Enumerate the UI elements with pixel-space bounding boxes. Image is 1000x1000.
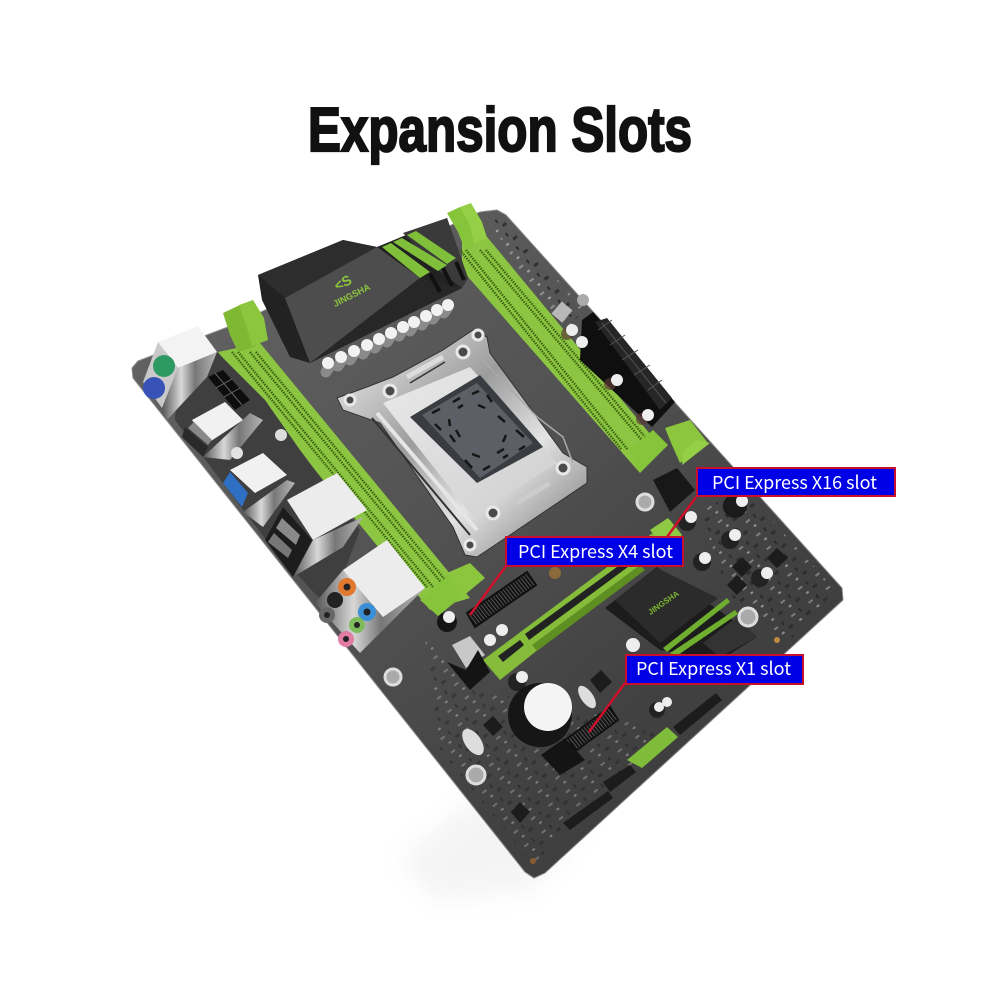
8-pin power connector	[208, 370, 250, 410]
chipset heatsink: JINGSHA	[646, 589, 681, 617]
component texture: lower board	[425, 640, 670, 868]
LAN and USB stack	[265, 473, 367, 577]
green front-panel connector	[627, 727, 678, 768]
heat spreader marks	[432, 391, 525, 470]
socket screws	[345, 330, 569, 550]
audio jacks	[319, 578, 376, 647]
CPU socket	[337, 330, 587, 557]
chipset heatsink	[605, 567, 757, 660]
rear IO panel	[143, 326, 425, 653]
audio panel	[315, 540, 425, 653]
CPU window	[410, 375, 543, 483]
USB 2.0 port	[182, 402, 263, 460]
24-pin power connector	[580, 312, 675, 427]
VRM heatsink	[258, 218, 468, 363]
CPU heat spreader	[422, 383, 533, 478]
M.2 slot	[653, 468, 695, 512]
chips	[483, 548, 788, 823]
PCI Express X4 slot	[467, 572, 536, 627]
socket plate	[383, 367, 557, 517]
PS/2 port	[143, 326, 217, 420]
right RAM slots	[447, 203, 710, 473]
motherboard	[132, 203, 843, 878]
drop shadow under board	[400, 800, 590, 900]
black block by X4 slot	[447, 650, 490, 690]
crystals	[458, 683, 599, 759]
IO base components	[175, 352, 360, 610]
socket levers	[372, 350, 573, 535]
small capacitors near X4 slot	[437, 567, 672, 718]
mounting holes	[385, 494, 757, 784]
battery	[508, 683, 572, 747]
callout lines	[470, 497, 696, 732]
left RAM slots	[218, 300, 485, 616]
board base	[132, 210, 843, 878]
capacitors by 24-pin connector	[551, 294, 654, 425]
PCI Express X16 slot	[483, 518, 682, 680]
VRM capacitors right	[530, 494, 780, 864]
title: Expansion Slots	[308, 96, 692, 165]
component texture: right	[700, 490, 835, 640]
component texture: upper right	[490, 216, 585, 335]
inductor near X4 slot	[452, 636, 485, 668]
heatsink logo: JINGSHA	[332, 282, 372, 309]
heatsink black fins	[430, 262, 464, 292]
heatsink green stripes	[382, 243, 430, 278]
label: PCI Express X4 slot: PCI Express X4 slot	[518, 538, 673, 564]
PCI Express X1 slot	[541, 707, 618, 775]
label: PCI Express X16 slot: PCI Express X16 slot	[712, 469, 877, 495]
socket frame	[337, 330, 587, 557]
USB 3.0 port	[223, 453, 295, 527]
headers	[563, 693, 722, 830]
label: PCI Express X1 slot: PCI Express X1 slot	[636, 655, 791, 681]
caps in IO area	[231, 429, 287, 459]
heatsink logo: <S	[331, 271, 354, 294]
VRM capacitors row	[322, 299, 454, 372]
